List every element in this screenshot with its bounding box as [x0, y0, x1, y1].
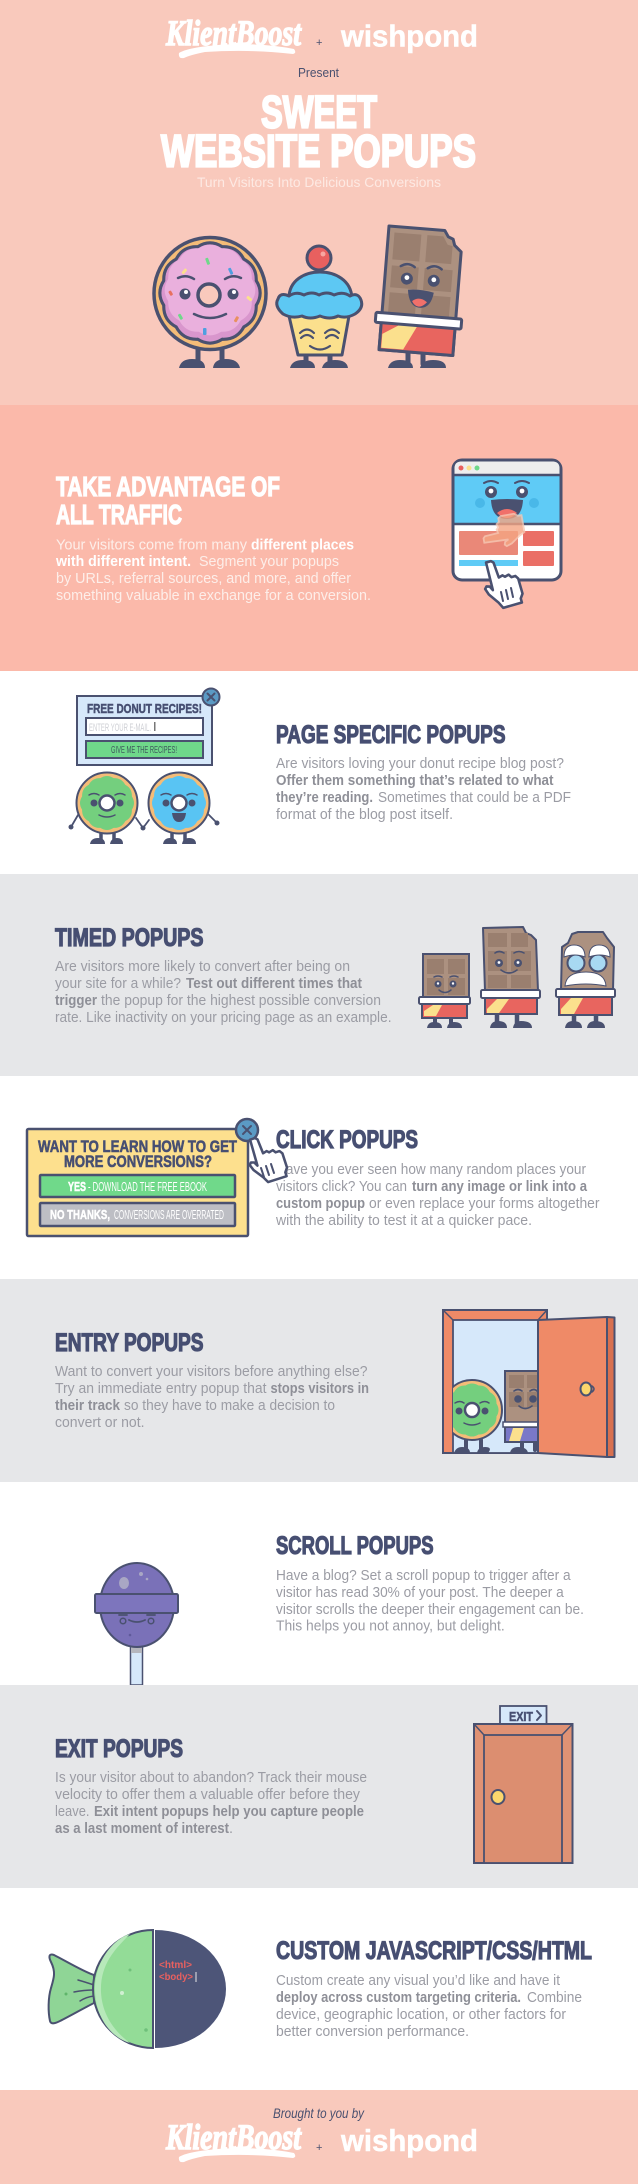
- illustration: exit door: [474, 1706, 572, 1863]
- text block: custom popup: [276, 1196, 365, 1212]
- popup form: ENTER YOUR E-MAIL.: [89, 722, 151, 734]
- button: yes: YES: [68, 1179, 86, 1194]
- text block: device, geographic location, or other factors for: [276, 2007, 566, 2023]
- popup form: FREE DONUT RECIPES!: [87, 702, 202, 716]
- icon: door panel: [538, 1317, 614, 1457]
- text block: [275, 1162, 600, 1229]
- code text: <html>: [159, 1959, 192, 1971]
- popup headline: MORE CONVERSIONS?: [64, 1152, 212, 1171]
- text block: Try an immediate entry popup that: [55, 1381, 266, 1397]
- credit text: Brought to you by: [273, 2106, 365, 2121]
- panel: custom javascript css html: [0, 1888, 638, 2090]
- text block: velocity to offer them a valuable offer before they: [55, 1787, 361, 1803]
- text block: convert or not.: [55, 1415, 144, 1431]
- button: yes: [40, 1175, 235, 1197]
- plus sign: +: [316, 2142, 322, 2154]
- text block: different places: [251, 538, 354, 554]
- icon: green donut: [68, 772, 143, 844]
- text block: leave.: [55, 1804, 90, 1820]
- close button: [236, 1119, 258, 1141]
- panel: page specific popups: [0, 671, 638, 874]
- button: no thanks: CONVERSIONS ARE OVERRATED: [114, 1208, 224, 1222]
- code text: [159, 1959, 196, 1983]
- text block: Are visitors loving your donut recipe blog post?: [276, 756, 564, 772]
- icon: half-code candy: [49, 1930, 226, 2048]
- panel: footer: [0, 2090, 638, 2184]
- exit sign: [500, 1706, 546, 1724]
- illustration: open door with characters: [442, 1310, 614, 1457]
- text block: with the ability to test it at a quicker pace.: [275, 1213, 532, 1229]
- text block: Sometimes that could be a PDF: [378, 790, 571, 806]
- text block: rate. Like inactivity on your pricing page as an example.: [55, 1010, 392, 1026]
- text block: by URLs, referral sources, and more, and offer: [56, 571, 351, 587]
- icon: disguised bar with glasses: [556, 932, 615, 1028]
- text block: [55, 959, 392, 1026]
- illustration: ebook popup with cursor: [27, 1119, 289, 1236]
- logo: wishpond: wishpond: [340, 18, 478, 54]
- illustration: three chocolate bars: [419, 927, 615, 1028]
- illustration: email popup with donuts: [68, 688, 220, 844]
- text block: format of the blog post itself.: [276, 807, 453, 823]
- text block: with different intent.: [55, 554, 191, 570]
- text block: visitor scrolls the deeper their engagement can be.: [276, 1602, 584, 1618]
- text block: deploy across custom targeting criteria.: [276, 1990, 521, 2006]
- icon: chocolate bar character: [373, 226, 469, 368]
- panel: hero: [0, 0, 638, 405]
- text block: Is your visitor about to abandon? Track their mouse: [55, 1770, 367, 1786]
- text block: [276, 756, 571, 823]
- panel: click popups: [0, 1076, 638, 1279]
- title: [161, 86, 476, 176]
- icon: happy browser with cursor: [453, 460, 561, 611]
- heading: TIMED POPUPS: [55, 924, 204, 952]
- text block: [276, 1568, 584, 1634]
- button: yes: - DOWNLOAD THE FREE EBOOK: [88, 1179, 207, 1194]
- exit sign: EXIT: [509, 1709, 533, 1724]
- title: SWEET: [261, 86, 377, 138]
- text block: Offer them something that’s related to what: [276, 773, 554, 789]
- text block: turn any image or link into a: [412, 1179, 588, 1195]
- text block: [55, 538, 371, 604]
- code text: <body>: [159, 1971, 193, 1983]
- logo: wishpond: wishpond: [340, 2123, 478, 2158]
- text block: Your visitors come from many: [56, 538, 248, 554]
- panel: scroll popups: [0, 1482, 638, 1685]
- heading: CLICK POPUPS: [276, 1126, 418, 1154]
- text block: or even replace your forms altogether: [369, 1196, 600, 1212]
- text block: stops visitors in: [270, 1381, 369, 1397]
- text block: [55, 1770, 367, 1837]
- text block: Are visitors more likely to convert after being on: [55, 959, 350, 975]
- plus sign: +: [316, 37, 322, 49]
- text block: Have you ever seen how many random places your: [276, 1162, 586, 1178]
- panel: entry popups: [0, 1279, 638, 1482]
- text block: their track: [55, 1398, 121, 1414]
- heading: ALL TRAFFIC: [56, 499, 182, 530]
- panel: exit popups: [0, 1685, 638, 1888]
- text block: Segment your popups: [199, 554, 339, 570]
- popup headline: [38, 1137, 237, 1171]
- logo: KlientBoost: KlientBoost: [165, 2117, 302, 2157]
- text block: .: [229, 1821, 233, 1837]
- subtitle: Turn Visitors Into Delicious Conversions: [197, 174, 441, 190]
- heading: TAKE ADVANTAGE OF: [56, 471, 280, 502]
- text block: the popup for the highest possible conversion: [101, 993, 381, 1009]
- icon: medium bar: [481, 927, 540, 1028]
- text block: something valuable in exchange for a conversion.: [56, 588, 371, 604]
- text block: trigger: [55, 993, 97, 1009]
- text block: so they have to make a decision to: [124, 1398, 335, 1414]
- logo: KlientBoost: KlientBoost: [165, 13, 302, 53]
- text block: Want to convert your visitors before anything else?: [55, 1364, 368, 1380]
- icon: chocolate bar peeking: [502, 1370, 537, 1452]
- icon: blue donut: [140, 772, 220, 844]
- present label: Present: [298, 65, 339, 80]
- heading: EXIT POPUPS: [55, 1735, 183, 1763]
- heading: [56, 471, 280, 530]
- text block: as a last moment of interest: [55, 1821, 229, 1837]
- text block: [276, 1973, 582, 2040]
- text block: [55, 1364, 369, 1431]
- text block: Have a blog? Set a scroll popup to trigger after a: [276, 1568, 571, 1584]
- heading: SCROLL POPUPS: [276, 1532, 434, 1560]
- button: no thanks: NO THANKS,: [50, 1208, 110, 1222]
- text block: Test out different times that: [186, 976, 362, 992]
- text block: Exit intent popups help you capture people: [94, 1804, 364, 1820]
- text block: visitors click? You can: [276, 1179, 407, 1195]
- panel: take advantage of all traffic: [0, 405, 638, 671]
- text block: This helps you not annoy, but delight.: [276, 1618, 505, 1634]
- heading: ENTRY POPUPS: [55, 1329, 204, 1357]
- icon: small bar: [419, 954, 470, 1028]
- icon: lollipop with wrapper band: [95, 1563, 178, 1685]
- popup form: [77, 688, 220, 765]
- panel: timed popups: [0, 874, 638, 1076]
- text block: your site for a while?: [55, 976, 181, 992]
- popup headline: WANT TO LEARN HOW TO GET: [38, 1137, 237, 1156]
- icon: green donut peeking: [453, 1379, 503, 1452]
- text block: Custom create any visual you’d like and have it: [276, 1973, 560, 1989]
- icon: cupcake character: [277, 246, 362, 368]
- text block: visitor has read 30% of your post. The deeper a: [276, 1585, 565, 1601]
- popup form: GIVE ME THE RECIPES!: [111, 744, 177, 756]
- button: no thanks: [40, 1203, 235, 1226]
- heading: PAGE SPECIFIC POPUPS: [276, 721, 506, 749]
- text block: Combine: [527, 1990, 582, 2006]
- icon: donut character: [154, 238, 266, 368]
- text block: they’re reading.: [276, 790, 373, 806]
- text block: better conversion performance.: [276, 2024, 469, 2040]
- icon: cursor hand: [242, 1131, 289, 1186]
- title: WEBSITE POPUPS: [161, 126, 476, 176]
